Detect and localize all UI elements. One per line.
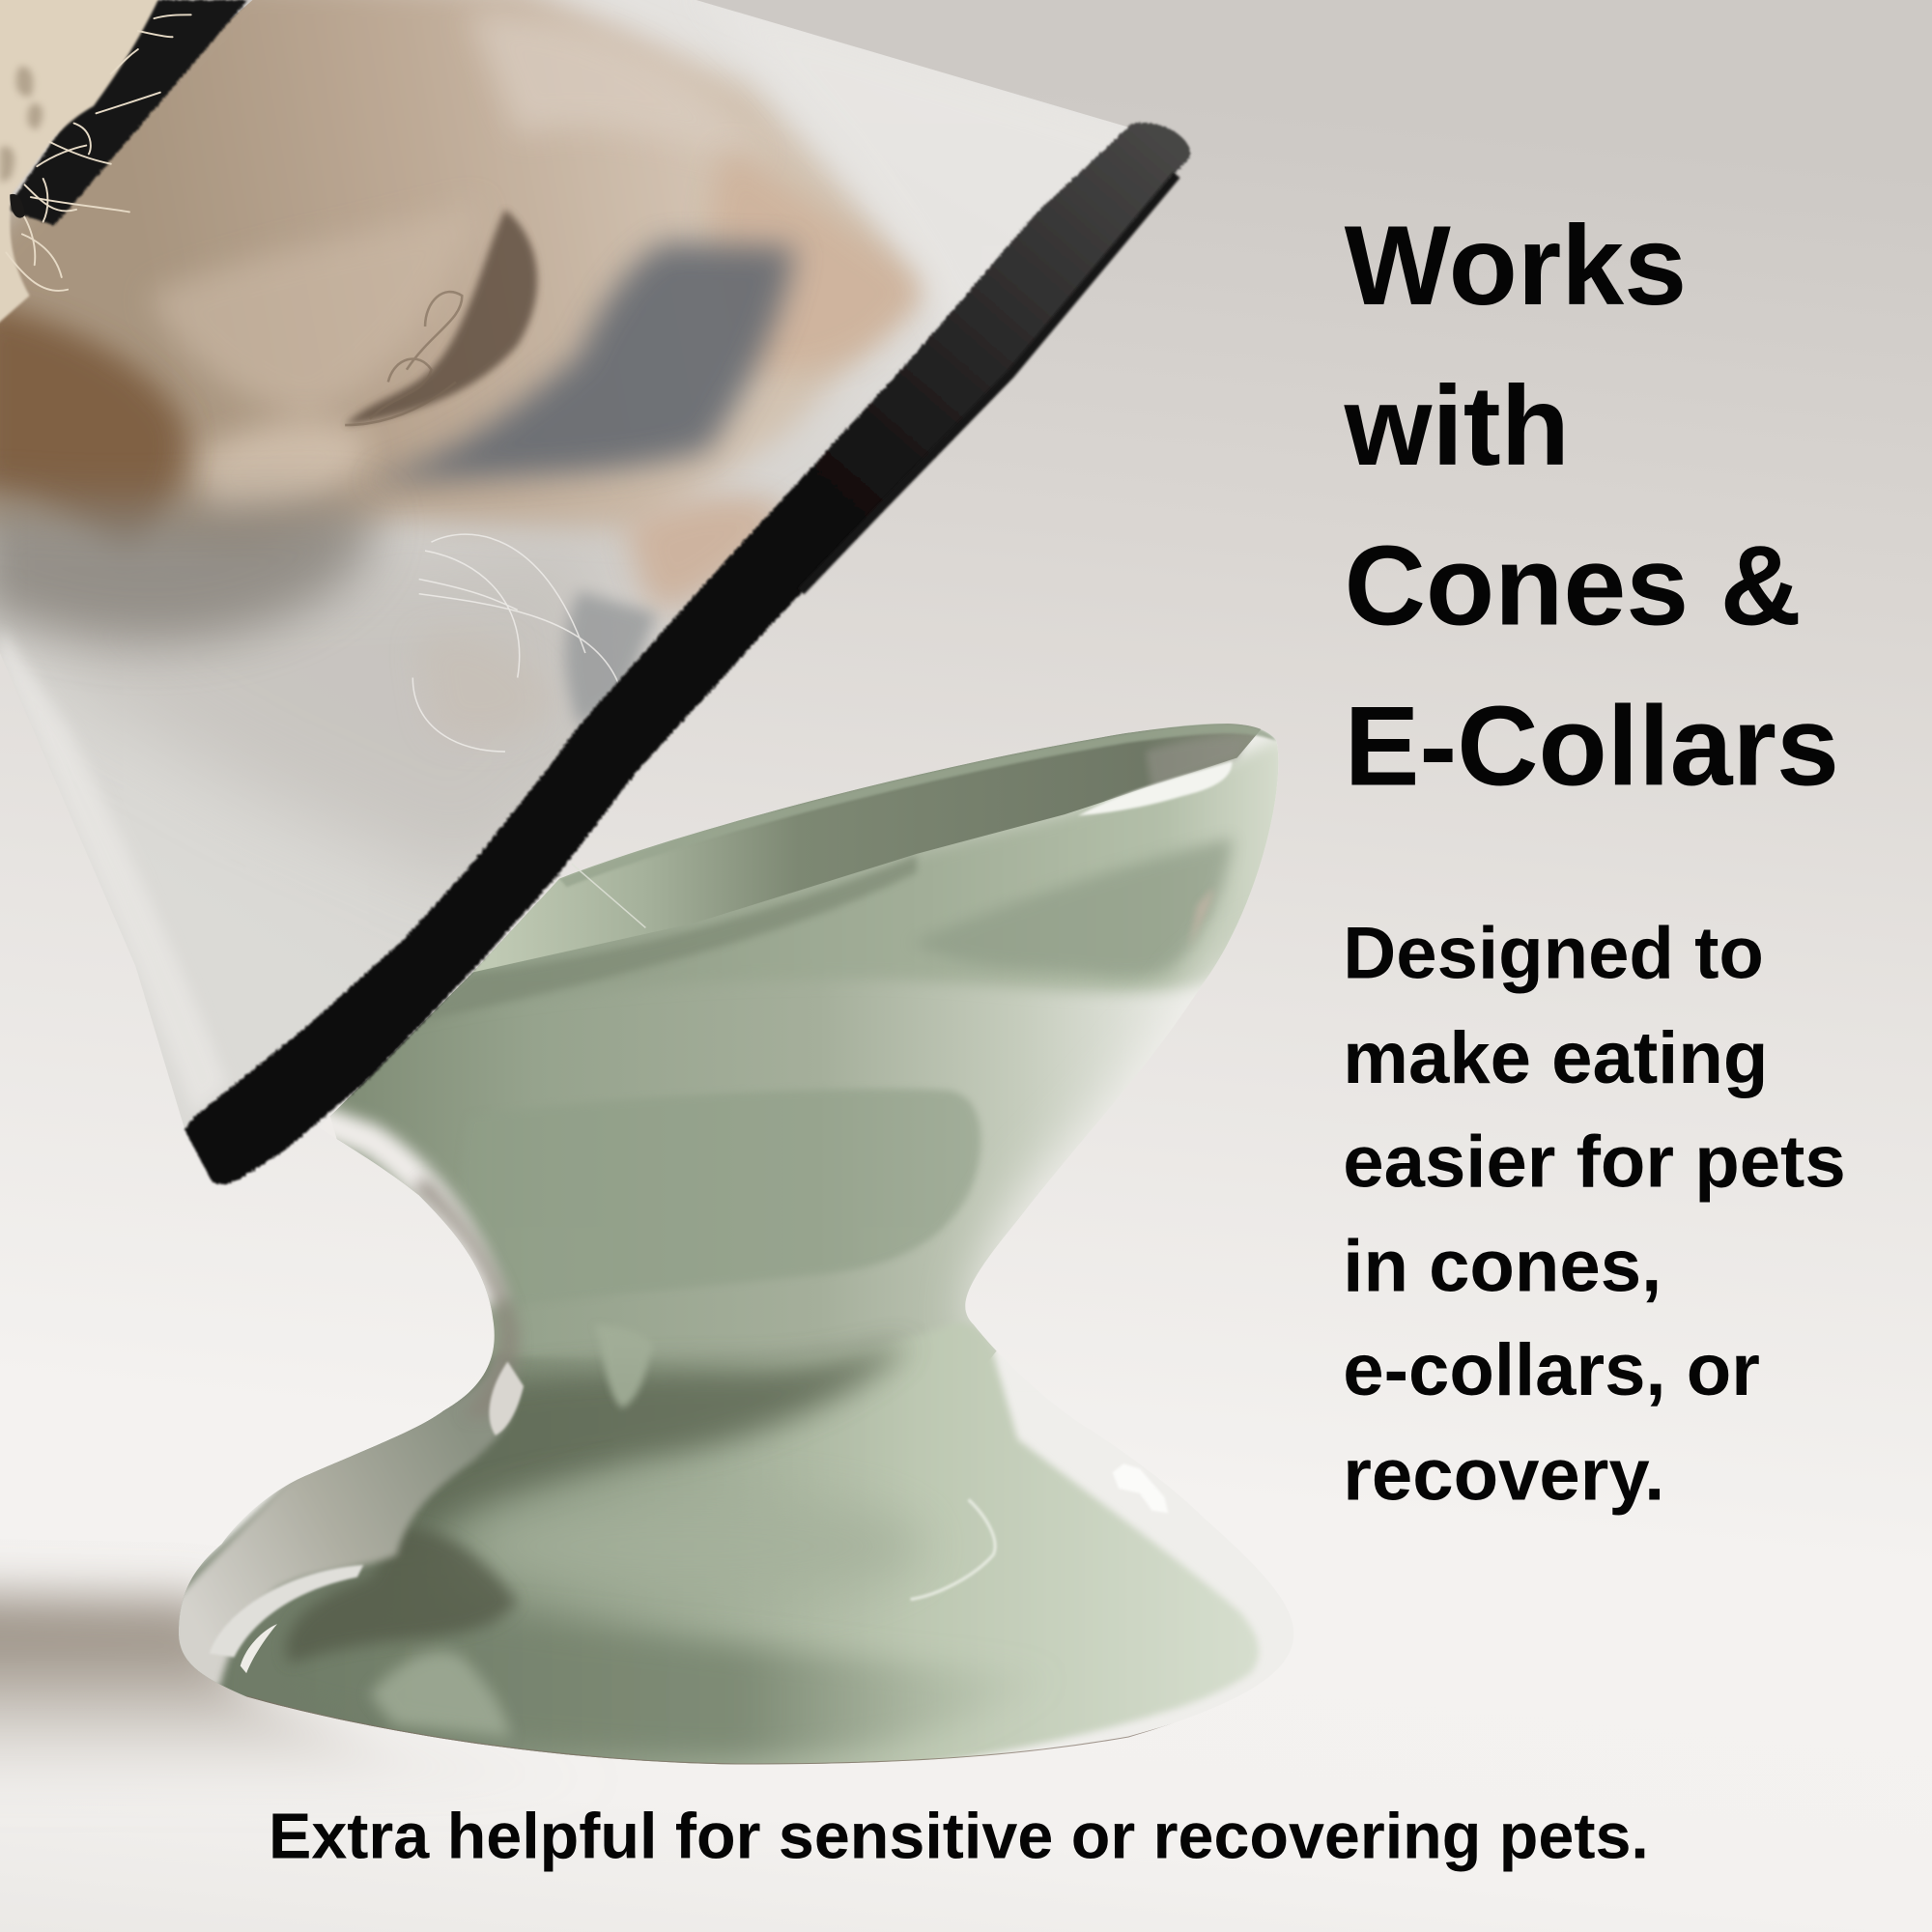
heading: with [1344,362,1570,489]
description: Designed to [1343,913,1764,995]
lower body dark reflection [649,1088,983,1285]
lip underside reflection [912,838,1233,977]
rosy reflection [1192,891,1213,934]
translucent pet cone [0,0,1190,1184]
grey left mid shadow [0,499,375,642]
pale lower mound [419,633,554,740]
blue grey muzzle shadow [370,242,795,483]
inner rim grey [1146,742,1245,784]
blurred main fur [0,0,926,554]
stem drip [602,1334,649,1410]
bowl shadow on table [0,1596,616,1805]
peach fur right [710,148,926,372]
description: easier for pets [1343,1121,1846,1203]
dark gap in fur [10,194,25,218]
base low pale patch [370,1652,511,1737]
base [160,1323,1259,1780]
base foot line [246,1686,1269,1765]
base dark left core [286,1527,518,1663]
description: e-collars, or [1343,1329,1760,1411]
dark curly fur [345,210,537,425]
right fade of body [953,951,1223,1328]
base glaze speckle [1113,1463,1168,1513]
pale fur streaks [148,203,480,419]
black velvet rim [185,123,1190,1184]
grey chin blur [565,591,657,727]
description: in cones, [1343,1226,1662,1308]
fur outside cone [0,0,164,332]
cone body [0,0,1190,1178]
fur strands [6,14,191,291]
heading: Cones & [1345,523,1802,649]
heading: E-Collars [1345,682,1839,809]
bowl interior [473,724,1263,972]
lighter fur top [469,13,764,160]
base lower dark band [286,1617,980,1764]
rim highlight [1078,761,1233,815]
brown lower left fur [0,301,185,549]
footer note: Extra helpful for sensitive or recovering pets. [269,1801,1649,1872]
peach lower patch [629,497,788,610]
stem left edge shade [412,1177,518,1417]
upper body [330,801,1171,1424]
base left mirror reflection [173,1350,518,1688]
lip shadow line [427,855,919,1019]
description: recovery. [1343,1434,1664,1516]
dog seen through cone [0,0,1182,1115]
lower cone grey haze [0,542,616,887]
green ceramic bowl [160,702,1331,1786]
curl strokes [345,292,462,425]
stem white streak [489,1361,524,1435]
rim top edge [559,724,1276,887]
left body soft edge [301,1115,491,1306]
left edge highlight [0,629,228,1115]
description: make eating [1343,1017,1768,1099]
base dark band [382,1343,912,1540]
black inner collar [6,0,247,225]
fur shadow tufts [0,67,43,183]
whiskers [412,534,618,752]
lip band [746,739,1279,999]
rim lower dark edge [801,175,1177,591]
stray hair on bowl [572,864,645,927]
base white arc [210,1565,363,1658]
top right pale band [690,0,1182,345]
heading: Works [1345,202,1687,328]
right text column [1343,202,1866,1516]
base right highlight [911,1499,995,1600]
pale fur cheek [197,421,370,518]
base bright centre [456,1491,924,1602]
bowl silhouette and shading [160,702,1331,1786]
